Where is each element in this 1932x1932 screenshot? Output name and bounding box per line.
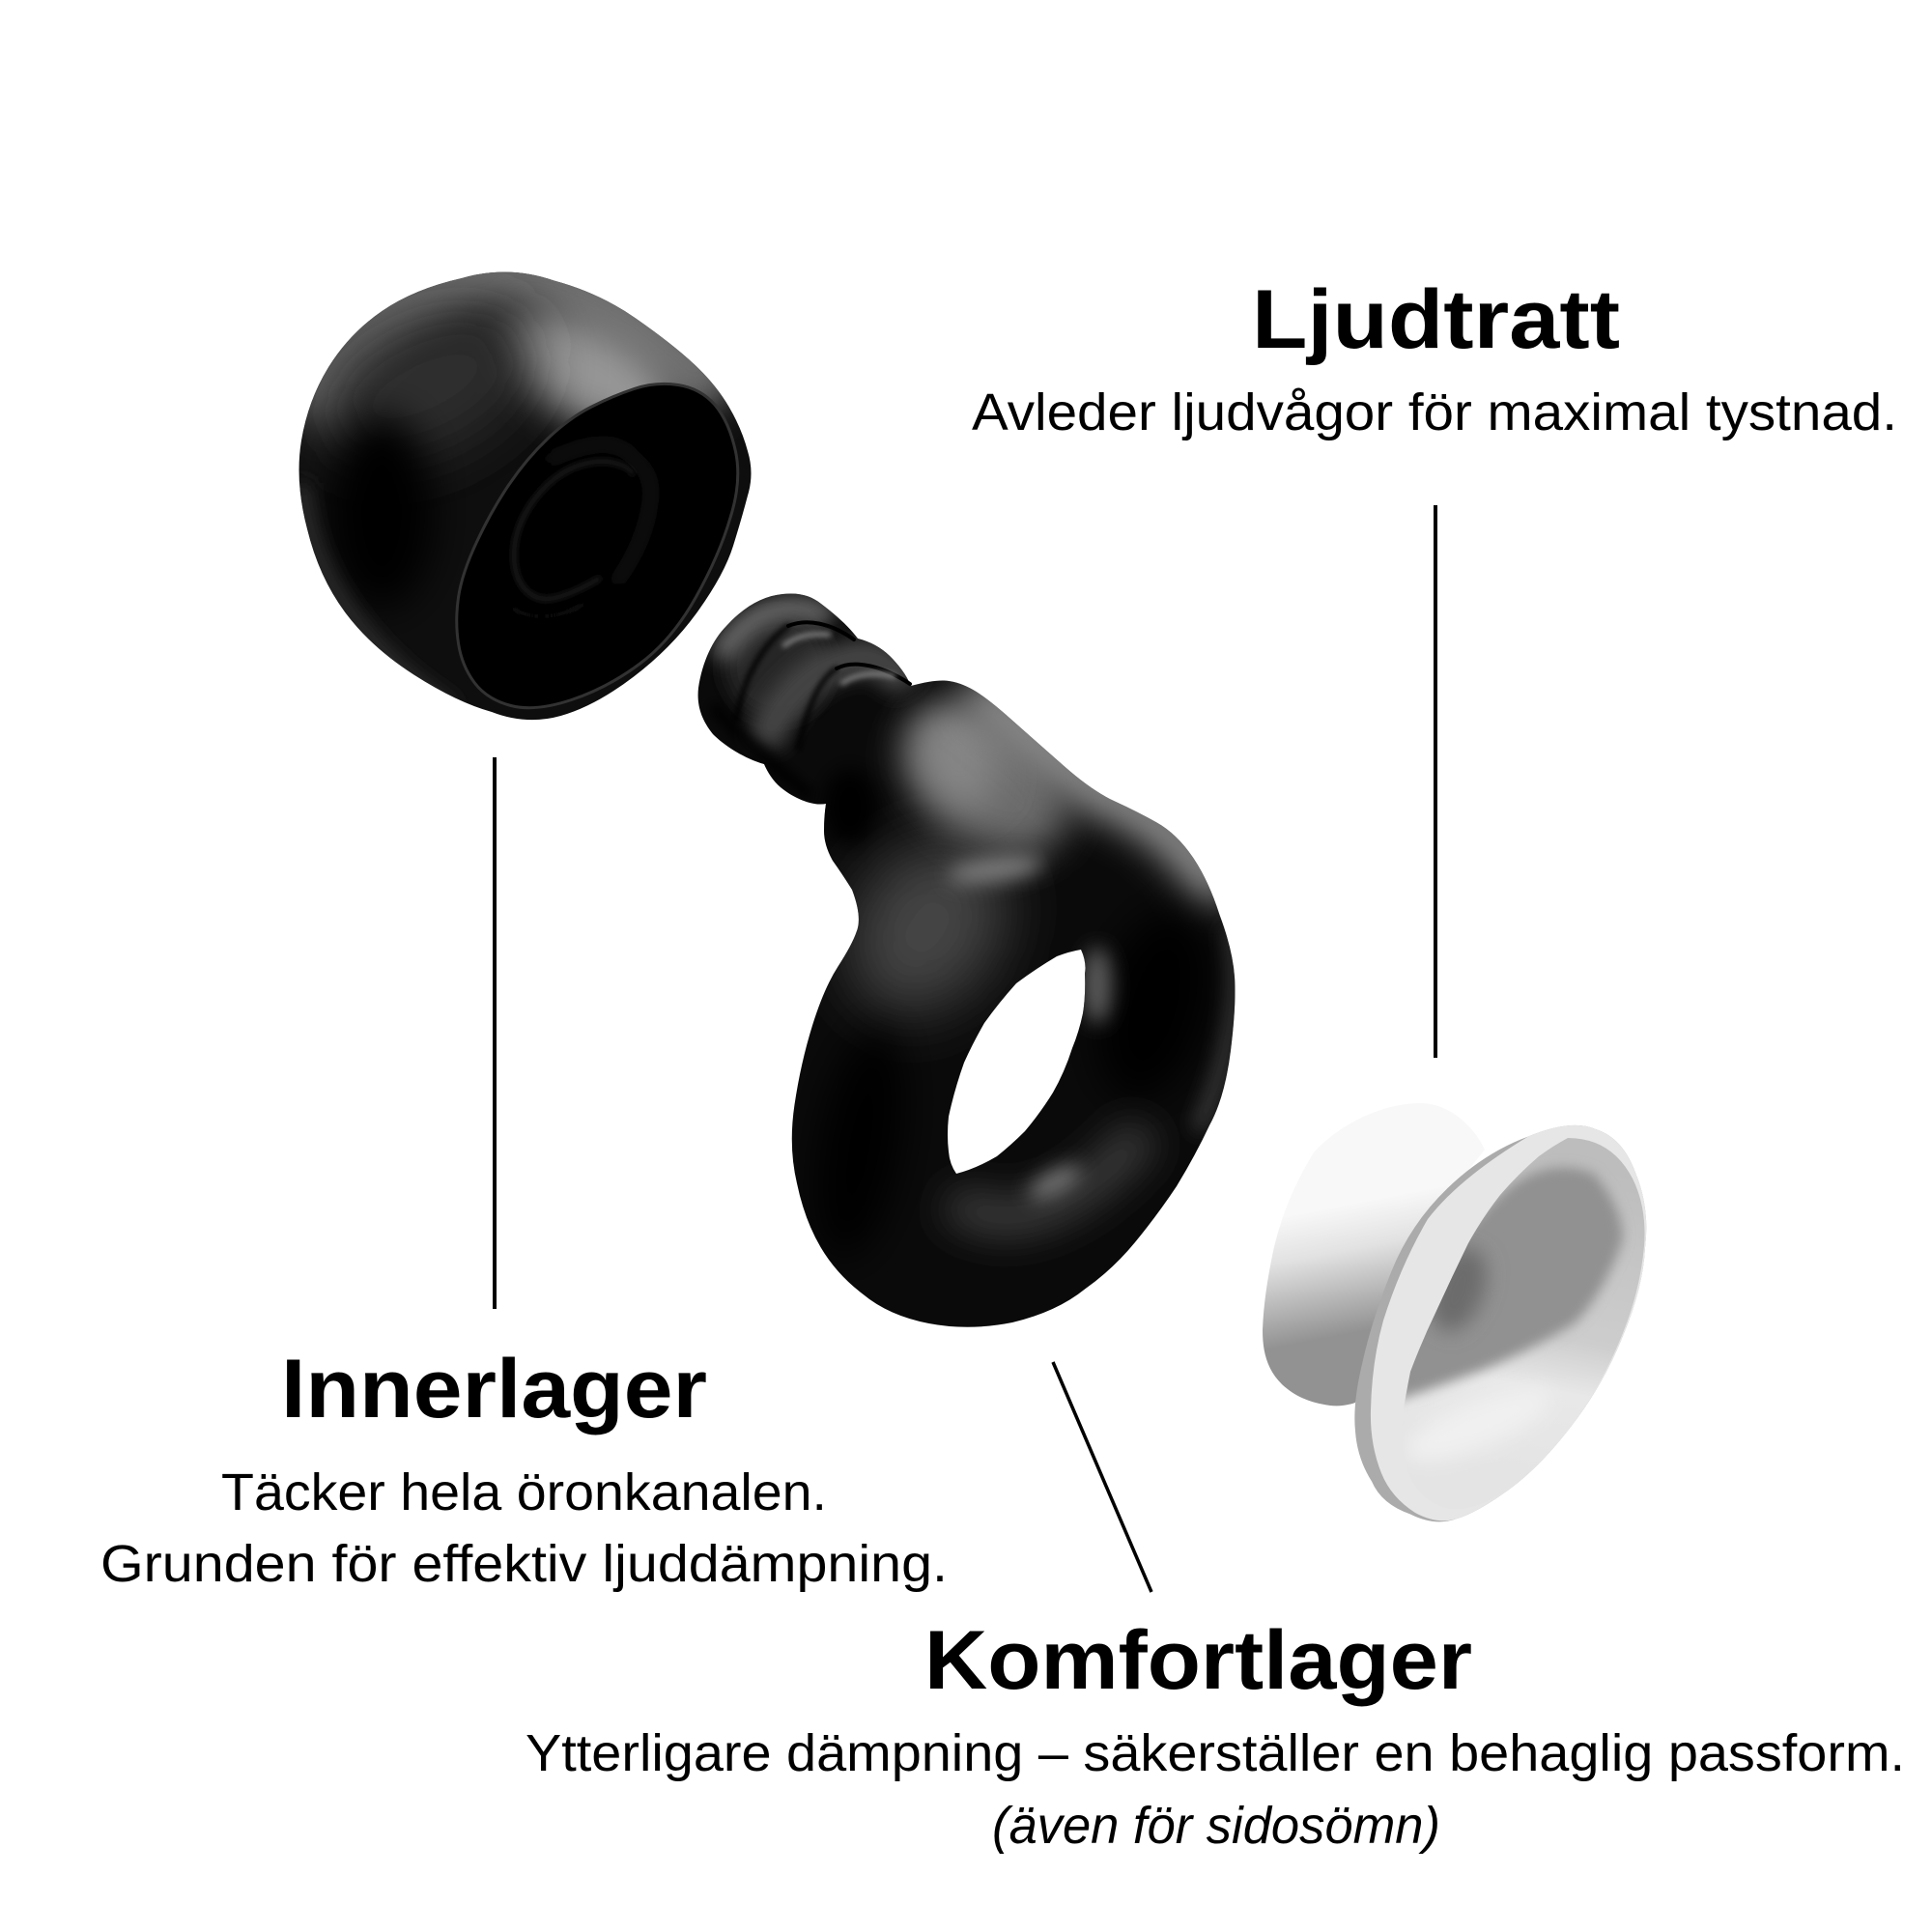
icon: inner layer ear tip	[292, 270, 752, 720]
text block: Innerlager	[100, 1343, 948, 1593]
icon: comfort layer with stem and ring	[698, 593, 1235, 1327]
description line 1: Komfortlager: Ytterligare dämpning – säkerställer en behaglig passform.	[526, 1724, 1905, 1782]
inner spiral channel	[509, 444, 651, 616]
flange face	[1371, 1125, 1646, 1520]
icon: white sound funnel	[1263, 1103, 1646, 1521]
description line 2: Innerlager: Grunden för effektiv ljuddämpning.	[100, 1535, 948, 1593]
leader line: Ljudtratt	[1434, 505, 1437, 1058]
description line 1: Innerlager: Täcker hela öronkanalen.	[221, 1463, 827, 1521]
heading: Innerlager: Innerlager	[281, 1343, 707, 1435]
leader line: Komfortlager	[1053, 1362, 1151, 1592]
description line 2: Komfortlager: (även för sidosömn)	[992, 1797, 1440, 1855]
text block: Ljudtratt	[972, 273, 1897, 441]
funnel hollow	[1402, 1138, 1644, 1509]
text block: Komfortlager	[526, 1614, 1905, 1855]
infographic canvas	[102, 272, 1900, 1854]
leader line: Innerlager	[493, 757, 497, 1309]
flange back edge	[1354, 1125, 1646, 1521]
heading: Ljudtratt: Ljudtratt	[1252, 273, 1620, 366]
stem grooves	[736, 622, 910, 749]
description: Ljudtratt: Avleder ljudvågor för maximal tystnad.	[972, 384, 1897, 441]
heading: Komfortlager: Komfortlager	[924, 1614, 1472, 1707]
inner opening of the ear tip	[457, 384, 738, 708]
